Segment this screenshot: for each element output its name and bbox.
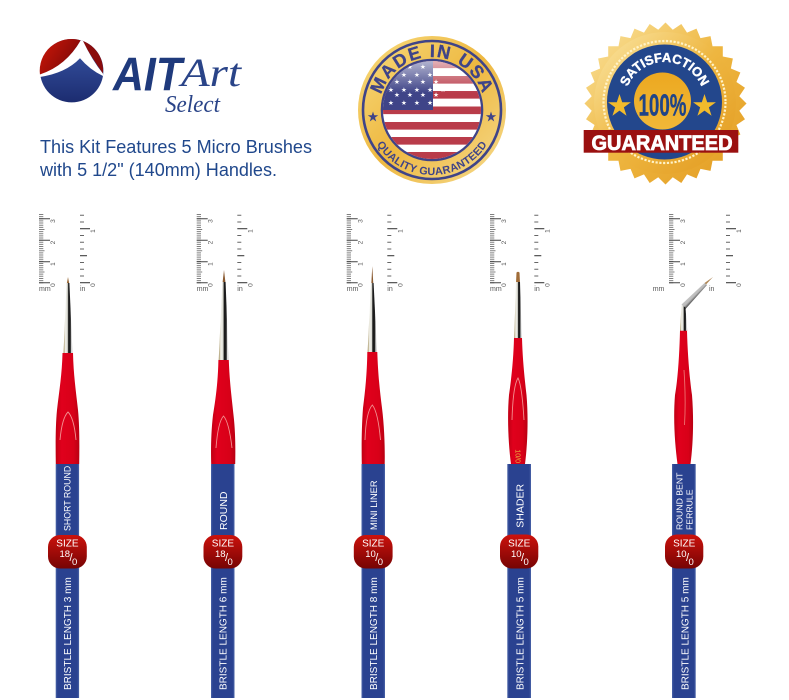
ruler: mm: 3 — [358, 219, 365, 223]
size badge — [500, 534, 538, 568]
ruler: mm: 3 — [208, 219, 215, 223]
ferrule — [368, 283, 377, 352]
handle — [508, 338, 528, 464]
icon: right star — [693, 94, 716, 116]
label: short round: SHORT ROUND — [62, 466, 72, 531]
size badge: / — [375, 552, 379, 564]
icon: US flag: ★★★ — [401, 71, 440, 79]
size badge: SIZE — [56, 539, 79, 550]
handle highlight — [216, 416, 232, 448]
size badge: SIZE — [212, 539, 234, 550]
ruler: mm: 2 — [680, 240, 687, 244]
label band — [507, 464, 531, 698]
size badge: 0 — [228, 557, 233, 568]
ruler: mm: mm — [653, 286, 665, 293]
label: bristle length: BRISTLE LENGTH 5 mm — [516, 577, 526, 690]
starburst — [580, 18, 750, 188]
bent ferrule — [682, 283, 707, 309]
bristle — [222, 270, 226, 283]
label: round bent ferrule: FERRULE — [684, 489, 694, 530]
size badge: / — [70, 552, 74, 564]
bristle — [67, 277, 69, 284]
bristle — [516, 272, 520, 283]
seal text: 100%: 100% — [638, 88, 686, 123]
size badge: SIZE — [508, 539, 531, 550]
seal text: made in usa: MADE IN USA — [370, 44, 492, 94]
size badge: 0 — [72, 557, 77, 568]
label: bristle length: BRISTLE LENGTH 3 mm — [63, 577, 74, 690]
size badge: 18 — [215, 549, 226, 560]
label: round: ROUND — [218, 491, 230, 530]
ruler: mm: 0 — [680, 283, 687, 287]
ruler: mm: 0 — [208, 283, 215, 287]
ferrule — [64, 283, 72, 353]
size badge: / — [225, 552, 229, 564]
ruler: mm: mm — [490, 286, 502, 293]
size badge: 10 — [365, 549, 376, 560]
ruler: mm — [39, 215, 57, 293]
ruler: mm: 2 — [501, 240, 508, 244]
size badge: 10 — [511, 549, 522, 560]
icon: US flag: ★★★★★ — [388, 86, 453, 94]
ruler: inches: 1 — [247, 229, 254, 233]
size badge: / — [686, 552, 690, 564]
guaranteed banner: GUARANTEED — [592, 132, 732, 155]
ruler: mm: 1 — [358, 262, 365, 266]
ruler: mm — [197, 215, 215, 293]
size badge: / — [521, 552, 525, 564]
ruler: inches — [387, 215, 404, 293]
ruler: mm: 3 — [680, 219, 687, 223]
ruler: inches: in — [709, 286, 715, 293]
icon: US flag: ★★ — [407, 63, 433, 71]
ruler: inches: in — [534, 286, 540, 293]
ruler: inches: in — [387, 286, 393, 293]
size badge: SIZE — [362, 539, 385, 550]
bristle — [704, 277, 713, 284]
ruler: inches: 1 — [90, 229, 97, 233]
ruler: inches: 0 — [544, 283, 551, 287]
label band — [56, 464, 79, 698]
ruler: inches: in — [237, 286, 243, 293]
ruler: mm — [347, 215, 365, 293]
label band — [672, 464, 696, 698]
ruler: mm: mm — [197, 286, 209, 293]
icon: logo globe — [40, 39, 103, 102]
icon: US flag: ★★★★★ — [388, 99, 453, 107]
ruler: mm: 1 — [501, 262, 508, 266]
handle highlight — [365, 405, 380, 440]
badge: made in USA — [358, 36, 506, 184]
handle highlight — [60, 412, 76, 440]
ruler: inches — [534, 215, 551, 293]
handle highlight — [512, 378, 524, 420]
ferrule — [219, 282, 228, 360]
ruler: mm: 1 — [50, 262, 57, 266]
ruler: mm: mm — [39, 286, 51, 293]
size badge — [204, 535, 242, 568]
icon: left star — [368, 112, 378, 121]
ruler: mm: 2 — [358, 240, 365, 244]
ruler: inches: 1 — [736, 229, 743, 233]
logo wordmark Art: Art — [177, 50, 242, 95]
ruler: mm: 2 — [50, 240, 57, 244]
size badge: 18 — [60, 549, 70, 560]
logo wordmark Select: Select — [165, 92, 221, 118]
ruler: mm — [653, 215, 687, 293]
ruler: inches: 0 — [736, 283, 743, 287]
size badge: 0 — [688, 557, 694, 568]
badge: satisfaction guaranteed — [584, 22, 746, 184]
ruler: inches: 1 — [544, 229, 551, 233]
handle — [362, 352, 385, 464]
ruler: mm: 1 — [680, 262, 687, 266]
bristle — [371, 266, 373, 284]
ruler: mm: 0 — [358, 283, 365, 287]
logo: AIT Art Select — [40, 39, 242, 118]
label band — [362, 464, 385, 698]
label: round bent ferrule: ROUND BENT — [675, 472, 685, 530]
size badge — [354, 535, 393, 568]
ruler: inches — [709, 215, 743, 293]
ruler: mm: mm — [347, 286, 359, 293]
handle — [211, 360, 235, 464]
size badge: 0 — [524, 557, 529, 568]
size badge: 0 — [378, 557, 383, 568]
brush 1: short round — [39, 215, 97, 698]
ruler: mm: 3 — [50, 219, 57, 223]
ruler: mm: 1 — [208, 262, 215, 266]
intro text: This Kit Features 5 Micro Brushes — [40, 136, 312, 157]
icon: US flag — [383, 60, 481, 160]
intro text — [39, 136, 312, 180]
ruler: inches — [237, 215, 254, 293]
intro text: with 5 1/2" (140mm) Handles. — [39, 159, 277, 180]
label: bristle length: BRISTLE LENGTH 8 mm — [369, 577, 380, 690]
brush 3: mini liner — [347, 215, 404, 698]
brush 2: round — [197, 215, 254, 698]
ruler: mm — [490, 215, 508, 293]
ruler: inches — [80, 215, 97, 293]
label: bristle length: BRISTLE LENGTH 5 mm — [680, 577, 692, 690]
ruler: inches: 0 — [397, 283, 404, 287]
ferrule — [514, 282, 522, 338]
handle size imprint: 10/0 — [514, 449, 520, 463]
handle highlight — [684, 370, 685, 425]
size badge — [48, 535, 87, 568]
icon: left star — [608, 94, 631, 116]
label: bristle length: BRISTLE LENGTH 6 mm — [218, 577, 230, 690]
size badge — [665, 534, 703, 568]
size badge: SIZE — [673, 539, 696, 550]
brush 5: round bent ferrule — [653, 215, 743, 698]
ruler: inches: 0 — [90, 283, 97, 287]
handle — [56, 353, 79, 464]
label band — [211, 464, 234, 698]
logo wordmark AIT: AIT — [112, 48, 186, 101]
seal text: satisfaction: SATISFACTION — [620, 52, 710, 86]
icon: right star — [486, 112, 496, 121]
seal text: quality guaranteed: QUALITY GUARANTEED — [378, 142, 486, 176]
icon: US flag: ★★★★ — [394, 91, 446, 99]
label: mini liner: MINI LINER — [369, 480, 379, 530]
size badge: 10 — [676, 549, 687, 560]
handle — [674, 331, 693, 464]
label: shader: SHADER — [514, 484, 526, 528]
ruler: mm: 2 — [208, 240, 215, 244]
ruler: inches: in — [80, 286, 86, 293]
ruler: mm: 3 — [501, 219, 508, 223]
brush 4: shader — [490, 215, 551, 698]
ruler: mm: 0 — [50, 283, 57, 287]
ruler: inches: 1 — [397, 229, 404, 233]
ruler: mm: 0 — [501, 283, 508, 287]
label: round bent ferrule — [675, 472, 694, 530]
icon: US flag: ★★★★ — [394, 78, 446, 86]
ruler: inches: 0 — [247, 283, 254, 287]
